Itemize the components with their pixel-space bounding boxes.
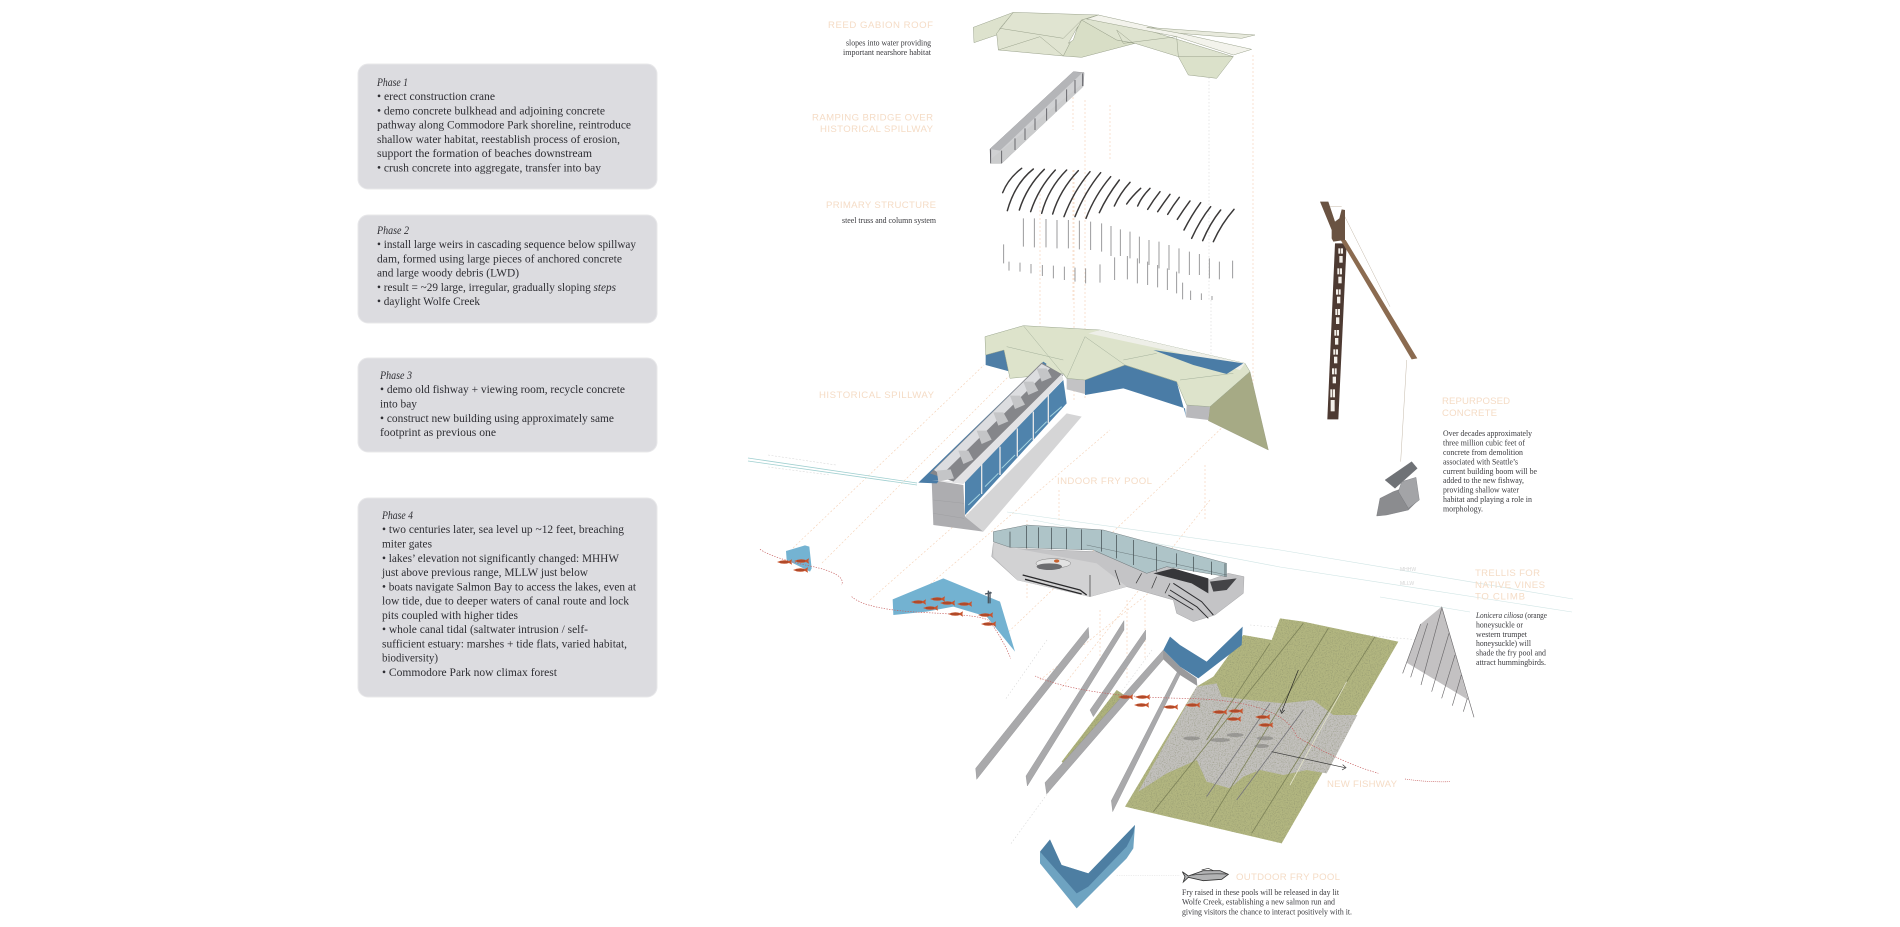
panel: phase 1: shallow water habitat, reestablish process of erosion, <box>377 133 620 146</box>
reed gabion roof <box>973 12 1255 78</box>
label: trellis: TRELLIS FOR <box>1475 568 1540 579</box>
label: new fishway: NEW FISHWAY <box>1327 779 1398 790</box>
panel: phase 1: Phase 1 <box>376 76 408 89</box>
panel: phase 3: Phase 3 <box>379 369 412 382</box>
label: primary structure: steel truss and column system <box>842 215 936 225</box>
dark channel lines <box>1153 623 1375 833</box>
tower crane <box>1320 202 1417 462</box>
panel: phase 1: pathway along Commodore Park shoreline, reintroduce <box>377 119 631 132</box>
panel: phase 2: Phase 2 <box>376 224 409 237</box>
spillway: channel <box>918 362 1082 532</box>
crane cable <box>1323 207 1407 462</box>
panel: phase 4: just above previous range, MLLW just below <box>381 566 589 579</box>
panel: phase 4: • boats navigate Salmon Bay to access the lakes, even at <box>382 580 637 594</box>
label: reed gabion roof: REED GABION ROOF <box>828 20 933 31</box>
label: ramping bridge <box>812 112 934 135</box>
label: trellis: honeysuckle) will <box>1476 638 1531 648</box>
panel: phase 2: and large woody debris (LWD) <box>377 267 519 280</box>
icon: salmon fry <box>1182 868 1228 882</box>
trellis <box>1403 607 1474 717</box>
label: repurposed concrete: added to the new fishway, <box>1443 475 1524 485</box>
label: trellis: attract hummingbirds. <box>1476 657 1546 667</box>
label: indoor fry pool: INDOOR FRY POOL <box>1057 476 1153 487</box>
label: outdoor fry pool: Fry raised in these pools will be released in day lit <box>1182 887 1339 897</box>
label: repurposed concrete: three million cubic feet of <box>1443 438 1525 448</box>
crane head <box>1320 202 1345 242</box>
panel: phase 4 <box>358 498 657 697</box>
panel: phase 4: pits coupled with higher tides <box>382 609 518 622</box>
panel: phase 1: • demo concrete bulkhead and adjoining concrete <box>377 104 605 118</box>
label: repurposed concrete: habitat and playing a role in <box>1443 494 1533 504</box>
blue pool connecting terrain <box>1163 627 1243 686</box>
label: repurposed concrete <box>1442 396 1537 514</box>
panel: phase 1: support the formation of beaches downstream <box>377 147 592 160</box>
gravel band <box>1138 683 1357 792</box>
panel: phase 2 <box>358 215 657 323</box>
panel: phase 3 <box>358 358 657 452</box>
panel: phase 4: low tide, due to deeper waters of canal route and lock <box>382 594 629 608</box>
panel: phase 3: into bay <box>380 398 417 410</box>
label: trellis: NATIVE VINES <box>1475 580 1545 591</box>
panel: phase 1 <box>358 64 657 189</box>
crane mast <box>1327 243 1347 419</box>
label: repurposed concrete: current building boom will be <box>1443 466 1537 476</box>
label: reed gabion roof: important nearshore habitat <box>843 47 932 57</box>
indoor fry pool <box>992 525 1244 622</box>
construction guide lines <box>748 55 1573 845</box>
panel: phase 4: sufficient estuary: marshes + tide flats, varied habitat, <box>382 638 627 650</box>
flow arrow south <box>1280 670 1298 713</box>
grass ground <box>1125 618 1398 843</box>
crane jib <box>1341 240 1417 359</box>
label: trellis: western trumpet <box>1476 629 1527 639</box>
panel: phase 2: • daylight Wolfe Creek <box>377 295 480 308</box>
panel: phase 3: • construct new building using approximately same <box>380 412 614 425</box>
panel: phase 3: • demo old fishway + viewing room, recycle concrete <box>380 383 625 396</box>
steel trusses <box>1003 168 1234 242</box>
weirs <box>976 621 1180 812</box>
water level labels <box>1400 567 1416 587</box>
spillway: roof assembly <box>985 326 1268 450</box>
small blue water pool <box>786 545 812 572</box>
label: repurposed concrete: morphology. <box>1443 504 1483 514</box>
flow arrow east <box>1272 752 1346 770</box>
label: outdoor fry pool: Wolfe Creek, establishing a new salmon run and <box>1182 897 1336 907</box>
label: repurposed concrete: concrete from demolition <box>1443 447 1524 457</box>
label: reed gabion roof: slopes into water providing <box>846 38 932 48</box>
label: historical spillway: HISTORICAL SPILLWAY <box>819 390 935 401</box>
label: repurposed concrete: providing shallow water <box>1443 485 1519 495</box>
panel: phase 1: • crush concrete into aggregate, transfer into bay <box>377 161 601 174</box>
large blue water pool <box>893 578 1015 652</box>
label: repurposed concrete: associated with Seattle’s <box>1443 456 1518 466</box>
steel columns <box>1004 218 1233 300</box>
visitor figure <box>985 591 992 603</box>
new fishway terrain <box>1125 618 1398 843</box>
panel: phase 4: Phase 4 <box>381 509 413 522</box>
panel: phase 4: • whole canal tidal (saltwater intrusion / self- <box>382 623 588 636</box>
fish path through fishway <box>1035 676 1450 782</box>
label: repurposed concrete: Over decades approximately <box>1443 428 1533 438</box>
panel: phase 3: footprint as previous one <box>380 426 496 439</box>
historical spillway <box>918 326 1268 532</box>
label: trellis: TO CLIMB <box>1475 592 1525 602</box>
label: outdoor fry pool <box>1182 872 1352 916</box>
label: trellis: Lonicera ciliosa (orange <box>1475 610 1547 620</box>
panel: phase 2: • result = ~29 large, irregular, gradually sloping steps <box>377 281 616 294</box>
label: primary structure <box>826 200 936 225</box>
panel: phase 2: dam, formed using large pieces of anchored concrete <box>377 252 622 265</box>
submerged shadow marks <box>1183 733 1273 748</box>
label: repurposed concrete: CONCRETE <box>1442 408 1497 419</box>
label: trellis: shade the fry pool and <box>1476 648 1547 658</box>
panel: phase 2: • install large weirs in cascading sequence below spillway <box>377 238 636 251</box>
label: ramping bridge: HISTORICAL SPILLWAY <box>820 124 934 135</box>
label: trellis: honeysuckle or <box>1476 619 1523 629</box>
label: reed gabion roof <box>828 20 933 57</box>
label: repurposed concrete: REPURPOSED <box>1442 396 1510 407</box>
label: primary structure: PRIMARY STRUCTURE <box>826 200 936 211</box>
outdoor fry pool <box>1040 825 1180 908</box>
panel: phase 1: • erect construction crane <box>377 90 495 103</box>
panel: phase 4: • two centuries later, sea level up ~12 feet, breaching <box>382 523 624 536</box>
label: outdoor fry pool: OUTDOOR FRY POOL <box>1236 872 1341 883</box>
concrete rubble <box>1377 462 1419 516</box>
panel: phase 4: biodiversity) <box>382 652 438 665</box>
ramping bridge <box>990 72 1084 163</box>
left outdoor pools and fish path <box>760 545 1015 658</box>
water level labels: MLLW <box>1400 581 1414 587</box>
panel: phase 4: • lakes’ elevation not significantly changed: MHHW <box>382 552 620 565</box>
water level labels: MHHW <box>1400 567 1416 573</box>
label: outdoor fry pool: giving visitors the chance to interact positively with it. <box>1182 906 1352 916</box>
label: ramping bridge: RAMPING BRIDGE OVER <box>812 112 933 124</box>
salmon school <box>777 558 1273 728</box>
panel: phase 4: miter gates <box>382 538 432 550</box>
panel: phase 4: • Commodore Park now climax forest <box>382 666 558 679</box>
label: trellis <box>1475 568 1547 667</box>
fish path dotted <box>760 549 1011 658</box>
